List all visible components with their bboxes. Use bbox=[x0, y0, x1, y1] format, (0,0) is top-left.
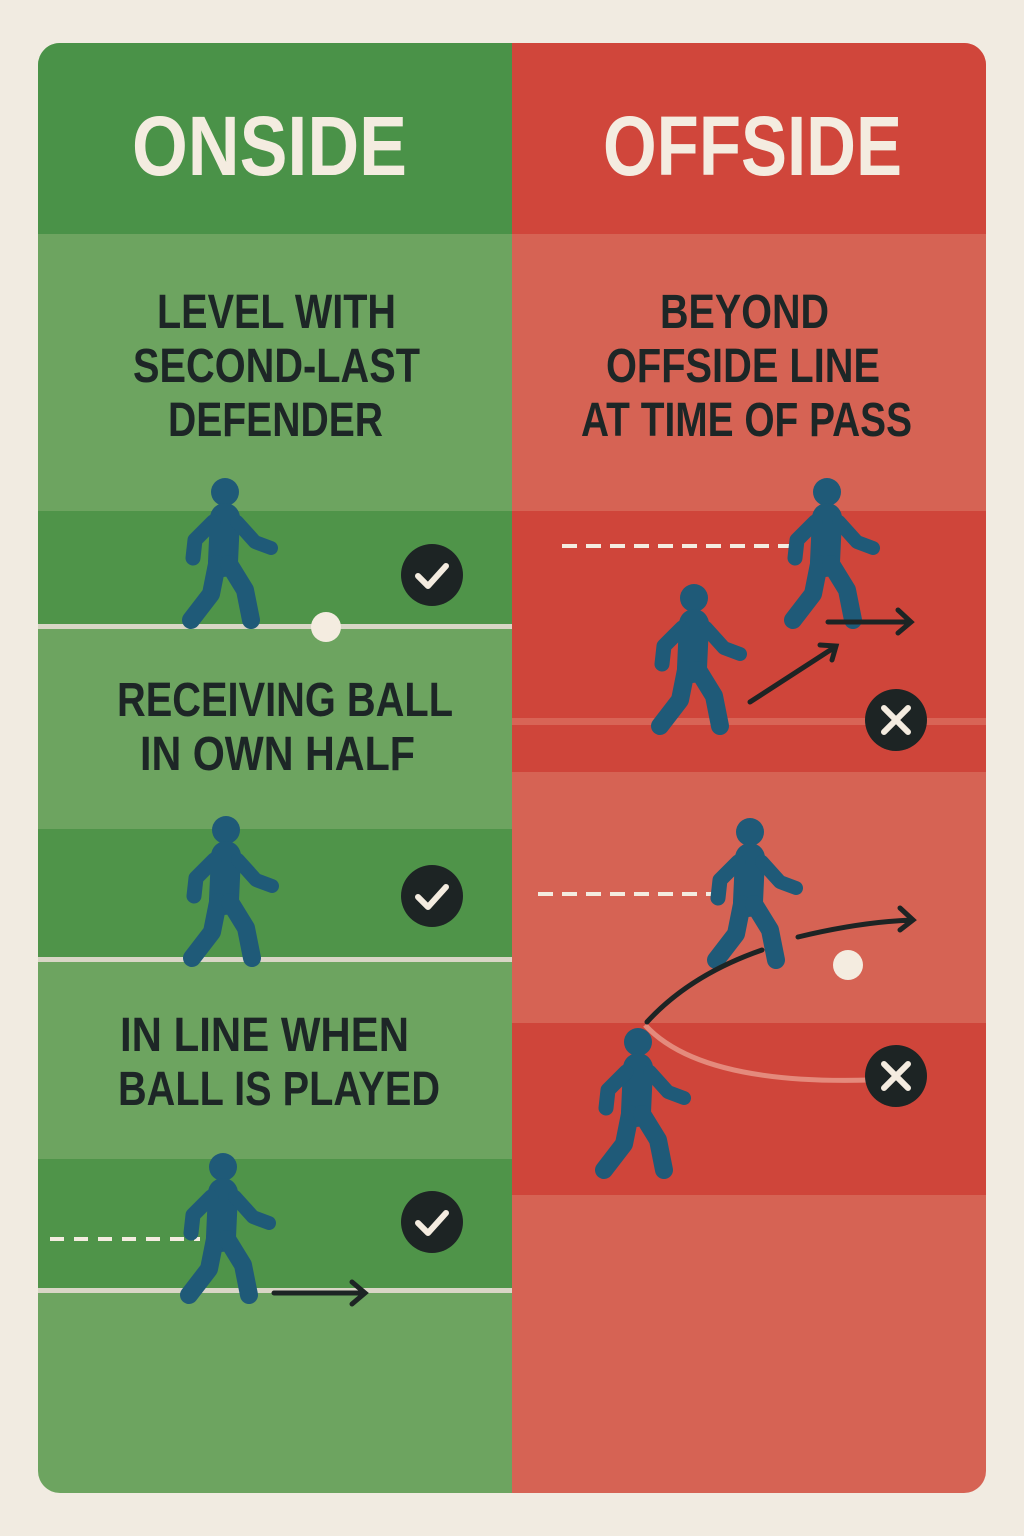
text: in line bbox=[118, 1009, 440, 1116]
panel: onside bbox=[38, 43, 512, 1493]
arrows: offside 1 bbox=[750, 610, 911, 702]
ball: onside 1 bbox=[311, 612, 341, 642]
player: onside 2 bbox=[192, 816, 272, 958]
text: level with: SECOND-LAST bbox=[133, 340, 420, 393]
arrows: offside 2 bbox=[647, 908, 913, 1022]
text: level with: LEVEL WITH bbox=[157, 286, 396, 339]
text: receiving ball: IN OWN HALF bbox=[140, 728, 415, 781]
text: in line: IN LINE WHEN bbox=[120, 1009, 409, 1062]
title: onside: ONSIDE bbox=[132, 99, 407, 193]
text: level with bbox=[133, 286, 420, 447]
text: in line: BALL IS PLAYED bbox=[118, 1063, 440, 1116]
text: beyond: BEYOND bbox=[660, 286, 829, 339]
ball: offside 2 bbox=[833, 950, 863, 980]
icon: check 1 bbox=[401, 544, 463, 606]
player: onside 3 bbox=[189, 1153, 269, 1295]
player: offside receiver bbox=[716, 818, 796, 960]
text: beyond: OFFSIDE LINE bbox=[606, 340, 880, 393]
text: receiving ball: RECEIVING BALL bbox=[117, 674, 453, 727]
player: offside attacker bbox=[793, 478, 873, 620]
text: level with: DEFENDER bbox=[168, 394, 383, 447]
icon: check 2 bbox=[401, 865, 463, 927]
player: offside passer 2 bbox=[604, 1028, 684, 1170]
icon: cross 2 bbox=[865, 1045, 927, 1107]
text: beyond bbox=[581, 286, 912, 447]
icon: cross 1 bbox=[865, 689, 927, 751]
player: offside passer bbox=[660, 584, 740, 726]
panel: offside bbox=[512, 43, 986, 1493]
icon: check 3 bbox=[401, 1191, 463, 1253]
text: receiving ball bbox=[117, 674, 453, 781]
curve: faint pass bbox=[645, 1025, 870, 1080]
title: offside: OFFSIDE bbox=[603, 99, 902, 193]
text: beyond: AT TIME OF PASS bbox=[581, 394, 912, 447]
player: onside 1 bbox=[191, 478, 271, 620]
line: offside 1 dashed bbox=[562, 544, 790, 548]
line: onside 3 dashed bbox=[50, 1237, 200, 1241]
line: offside 2 dashed bbox=[538, 892, 712, 896]
arrow: onside 3 bbox=[274, 1282, 365, 1304]
